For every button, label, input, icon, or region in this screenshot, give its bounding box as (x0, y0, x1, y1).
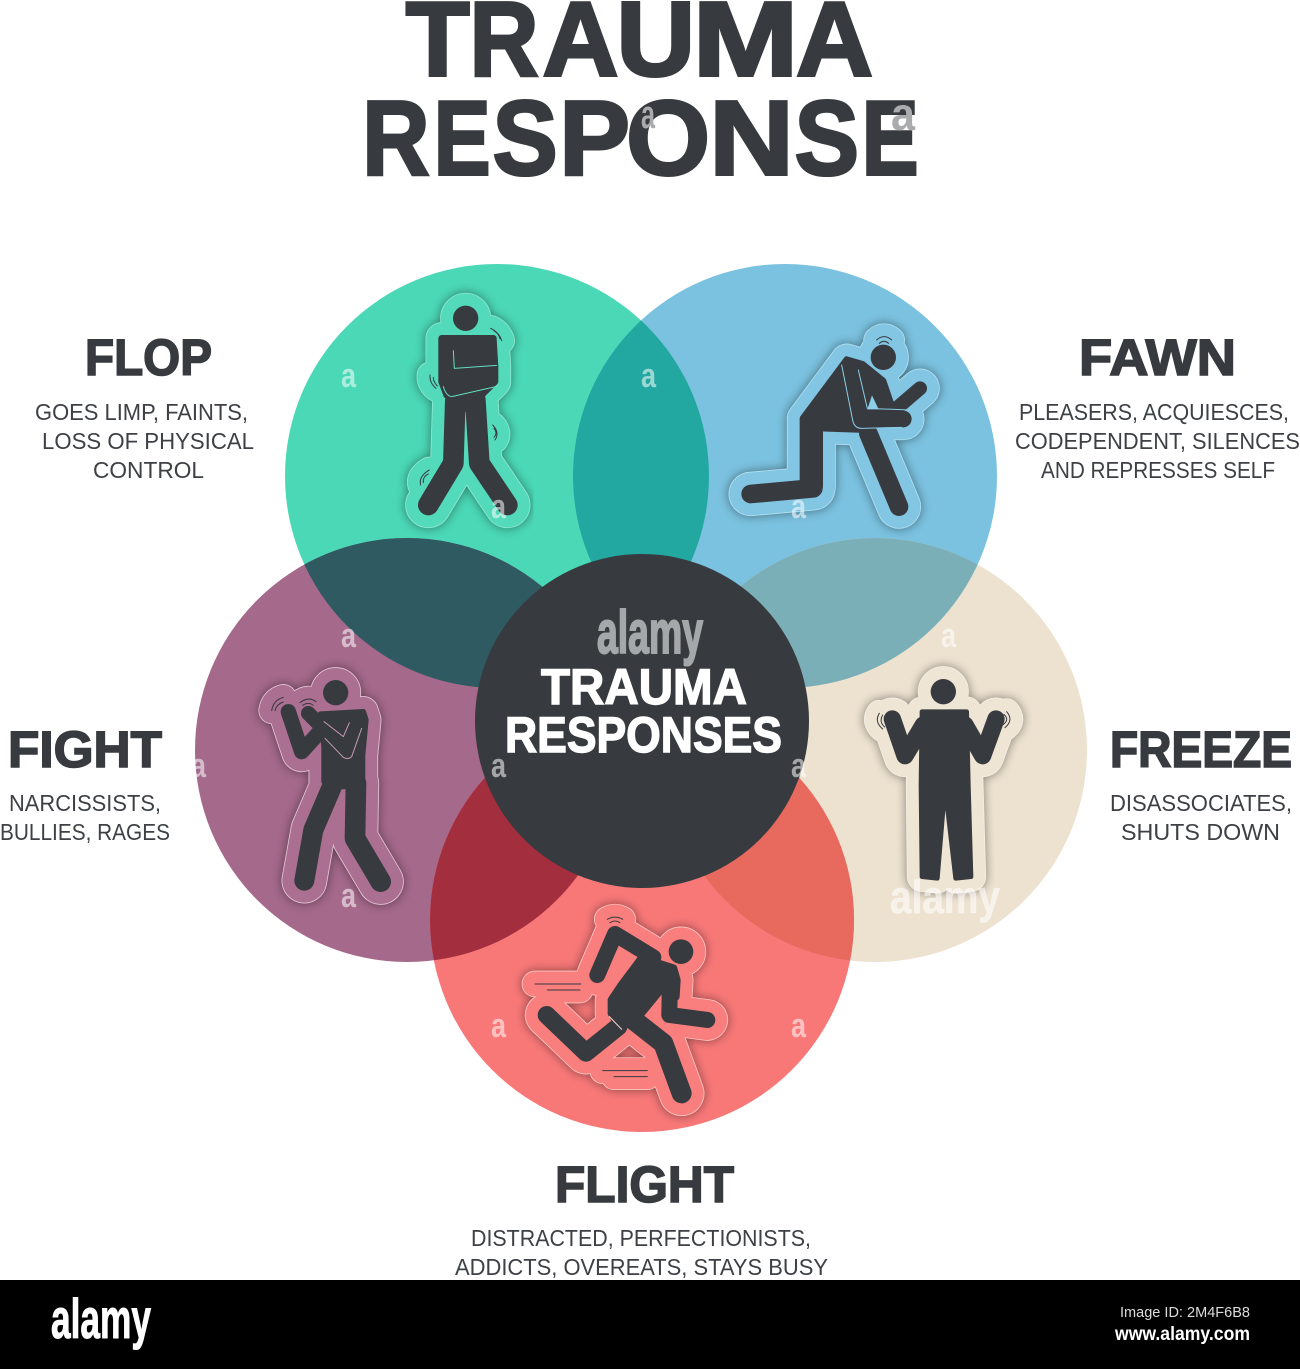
label: fawn (1015, 329, 1300, 483)
watermarks: a (791, 1007, 807, 1045)
title: O (626, 80, 710, 198)
watermarks: a (341, 877, 357, 915)
flop arm highlight (443, 351, 499, 397)
center circle (475, 554, 809, 888)
watermarks: a (491, 747, 507, 785)
watermarks: a (941, 617, 957, 655)
overlap: fawn and freeze (740, 538, 978, 687)
footer bar (0, 1280, 1300, 1369)
label: freeze (1110, 721, 1292, 845)
label: flop (35, 329, 254, 483)
center label: RESPONSES (505, 707, 782, 763)
watermarks: alamy (890, 871, 1000, 923)
label: fight: BULLIES, RAGES (0, 819, 170, 845)
label: flop: FLOP (85, 329, 212, 386)
footer logo: alamy (51, 1287, 151, 1350)
title: N (709, 80, 794, 198)
title: P (559, 80, 630, 198)
icon: flight figure (535, 917, 707, 1093)
watermarks: a (641, 357, 657, 395)
center label: TRAUMA (541, 659, 747, 715)
watermarks: a (641, 93, 655, 137)
label: flight: DISTRACTED, PERFECTIONISTS, (471, 1225, 811, 1251)
label: freeze: SHUTS DOWN (1121, 819, 1280, 845)
watermarks (191, 88, 1000, 1045)
fawn arm highlight (842, 365, 910, 428)
overlap: fight and flight (430, 778, 578, 960)
label: flight: FLIGHT (555, 1156, 734, 1213)
label: fight (0, 721, 170, 845)
label: flight: ADDICTS, OVEREATS, STAYS BUSY (455, 1254, 828, 1280)
label: fawn: AND REPRESSES SELF (1041, 457, 1275, 483)
title: S (795, 80, 859, 198)
watermarks: a (491, 488, 507, 526)
fight arm highlight (324, 722, 362, 759)
watermarks: alamy (597, 599, 703, 666)
circle: freeze (663, 538, 1087, 962)
overlap: flop and fight (304, 538, 542, 688)
label: flop: GOES LIMP, FAINTS, (35, 399, 248, 425)
label: fight: FIGHT (8, 721, 162, 778)
watermarks: a (191, 747, 207, 785)
venn diagram (195, 264, 1087, 1132)
circle: flop (285, 264, 709, 688)
watermarks: a (491, 1007, 507, 1045)
watermarks: a (791, 747, 807, 785)
center label (505, 659, 782, 763)
icon: fawn figure (751, 337, 920, 507)
watermarks: a (341, 617, 357, 655)
watermarks: a (891, 88, 915, 140)
watermarks: a (341, 357, 357, 395)
overlap: freeze and flight (704, 778, 854, 960)
label: fight: NARCISSISTS, (9, 790, 161, 816)
title: R (362, 80, 430, 198)
title: E (862, 80, 918, 198)
footer image id: Image ID: 2M4F6B8 (1120, 1304, 1250, 1321)
watermarks: a (791, 488, 807, 526)
label: flight (455, 1156, 828, 1280)
icon: fight figure (272, 680, 381, 882)
circle: flight (430, 708, 854, 1132)
icon: freeze figure (877, 679, 1010, 878)
label: freeze: DISASSOCIATES, (1110, 790, 1292, 816)
flight leg highlight (609, 1017, 622, 1029)
title (362, 0, 918, 198)
label: fawn: FAWN (1079, 329, 1236, 386)
overlap: flop and fawn (573, 320, 709, 562)
title: S (493, 80, 558, 198)
title: E (434, 80, 490, 198)
footer url: www.alamy.com (1114, 1324, 1250, 1345)
circle: fight (195, 538, 619, 962)
label: flop: CONTROL (93, 457, 204, 483)
circle: fawn (573, 264, 997, 688)
icon: flop figure (420, 306, 507, 505)
label: flop: LOSS OF PHYSICAL (42, 428, 254, 454)
